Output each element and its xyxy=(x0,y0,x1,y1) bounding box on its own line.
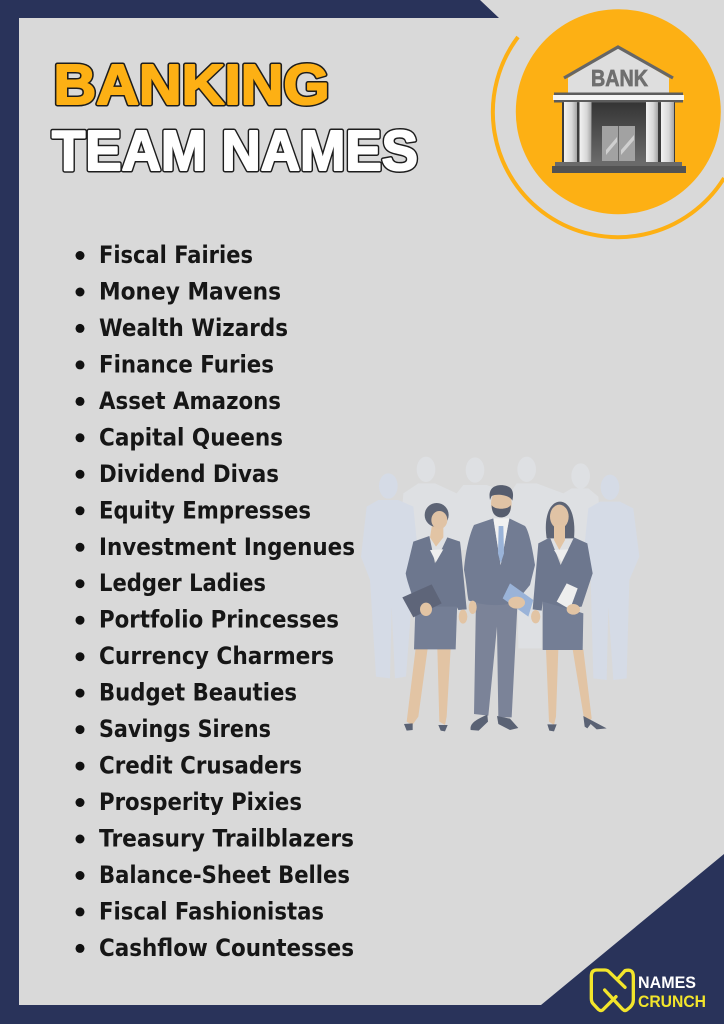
bulleted list of team names: Ledger Ladies xyxy=(99,569,266,597)
bulleted list of team names: Finance Furies xyxy=(99,350,274,378)
bulleted list of team names: Capital Queens xyxy=(99,423,283,451)
bulleted list of team names: Portfolio Princesses xyxy=(99,606,339,634)
title: TEAM NAMES xyxy=(52,119,418,183)
logo: Names Crunch: CRUNCH xyxy=(638,992,706,1011)
bulleted list of team names: Asset Amazons xyxy=(99,387,281,415)
background silhouettes xyxy=(402,457,600,648)
bulleted list of team names xyxy=(76,241,355,962)
bulleted list of team names: Dividend Divas xyxy=(99,460,279,488)
bulleted list of team names: Cashflow Countesses xyxy=(99,934,354,962)
logo: Names Crunch: NAMES xyxy=(638,973,696,992)
bulleted list of team names: Credit Crusaders xyxy=(99,752,302,780)
title: BANKING xyxy=(54,53,330,117)
bulleted list of team names: Savings Sirens xyxy=(99,715,271,743)
bulleted list of team names: Wealth Wizards xyxy=(99,314,288,342)
logo: Names Crunch xyxy=(591,970,706,1011)
title: BANKING xyxy=(54,53,330,117)
bulleted list of team names: Equity Empresses xyxy=(99,496,311,524)
icon: bank in orange circle: BANK xyxy=(591,65,648,91)
illustration: business team xyxy=(361,457,639,731)
left woman xyxy=(402,503,467,731)
icon: bank in orange circle xyxy=(493,9,724,237)
bulleted list of team names: Investment Ingenues xyxy=(99,533,355,561)
bulleted list of team names: Fiscal Fashionistas xyxy=(99,897,324,925)
bulleted list of team names: Treasury Trailblazers xyxy=(99,824,354,852)
man xyxy=(464,485,535,731)
title: TEAM NAMES xyxy=(52,119,418,183)
bulleted list of team names: Money Mavens xyxy=(99,278,281,306)
title xyxy=(52,53,418,183)
bulleted list of team names: Fiscal Fairies xyxy=(99,241,253,269)
bulleted list of team names: Prosperity Pixies xyxy=(99,788,302,816)
bulleted list of team names: Currency Charmers xyxy=(99,642,334,670)
bulleted list of team names: Balance-Sheet Belles xyxy=(99,861,350,889)
bulleted list of team names: Budget Beauties xyxy=(99,679,297,707)
right woman xyxy=(531,502,607,731)
